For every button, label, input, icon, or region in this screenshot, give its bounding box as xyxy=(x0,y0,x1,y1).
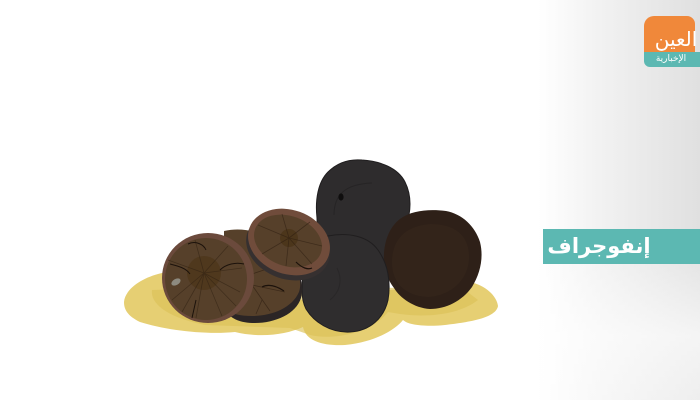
yellow splash under the limes xyxy=(124,273,498,345)
black lime: bottom centre xyxy=(302,235,389,332)
logo subtitle: الإخبارية xyxy=(656,54,686,64)
dried lime slice: left xyxy=(162,233,254,323)
brown lime: right xyxy=(384,210,482,309)
logo name: العين xyxy=(655,27,697,51)
black lime: top xyxy=(316,160,410,268)
logo lower teal band xyxy=(644,52,700,67)
banner: infographic label xyxy=(543,229,700,264)
logo orange block xyxy=(644,16,695,56)
banner text: إنفوجراف xyxy=(547,234,651,258)
dried lime slice: back xyxy=(224,230,302,323)
dried lime slice: top xyxy=(237,198,339,292)
logo xyxy=(644,16,700,67)
